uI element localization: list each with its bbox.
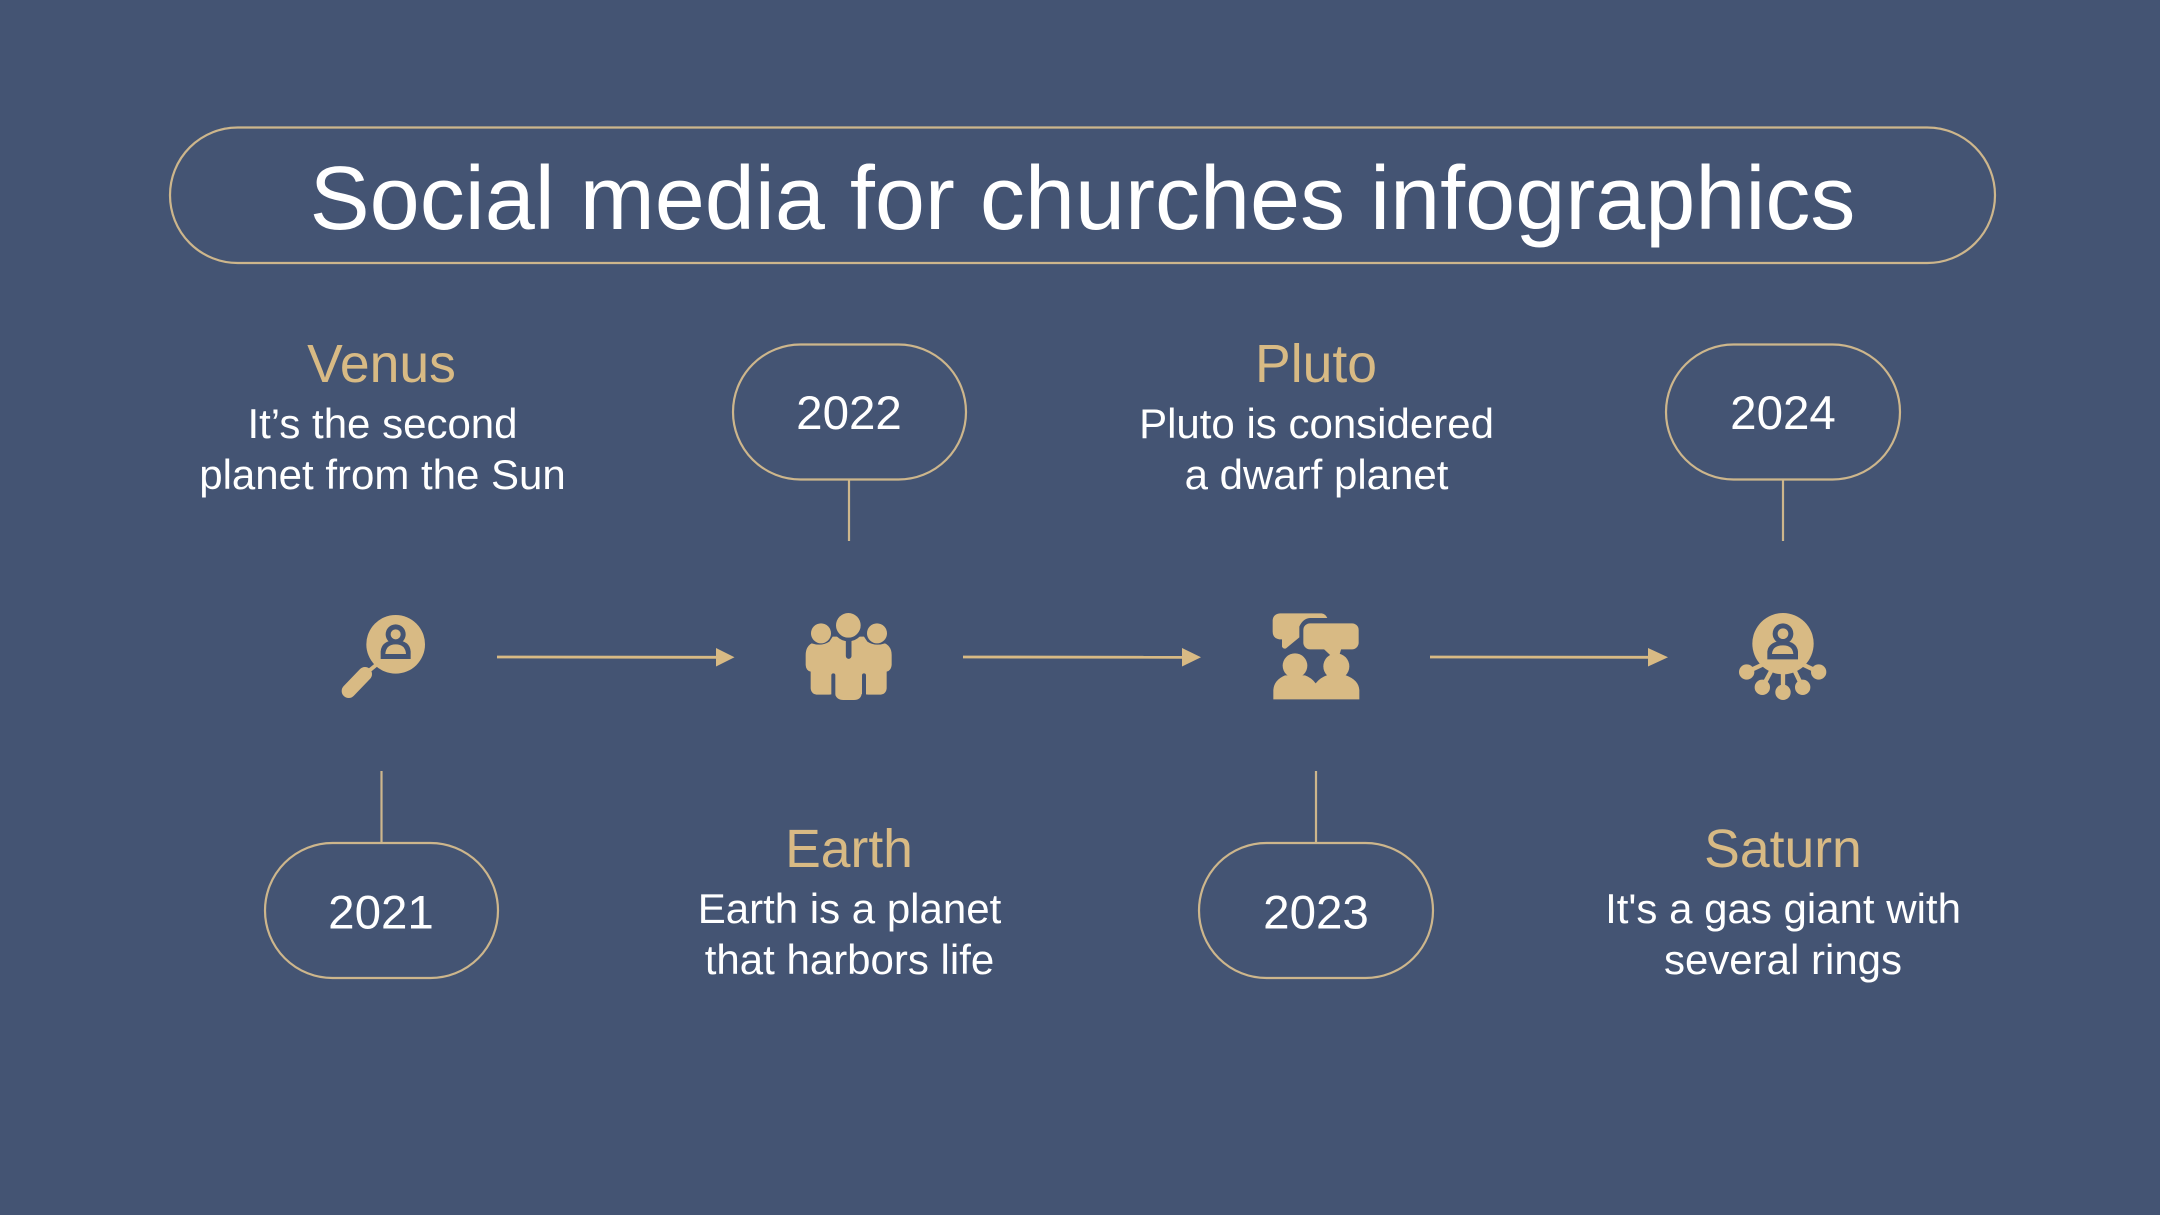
text block: Earth: [698, 820, 1002, 983]
text block: Pluto: Pluto: [1255, 335, 1377, 394]
title: Social media for churches infographics: [310, 149, 1855, 249]
icon: person with network nodes: [1739, 613, 1826, 700]
icon: group of people: [806, 609, 892, 700]
year pill: 2024: 2024: [1730, 387, 1836, 440]
icon: magnifier with person: [349, 615, 425, 691]
text block: Earth: that harbors life: [705, 936, 994, 983]
text block: Venus: It’s the second: [247, 400, 518, 447]
year pill: 2023: [1199, 771, 1433, 978]
arrow 1: [497, 648, 734, 666]
text block: Venus: planet from the Sun: [199, 451, 566, 498]
year pill: 2023: 2023: [1263, 886, 1369, 940]
text block: Earth: Earth is a planet: [698, 885, 1002, 932]
text block: Saturn: several rings: [1664, 936, 1902, 983]
year pill: 2021: 2021: [328, 886, 434, 940]
year pill: 2021: [265, 771, 498, 978]
text block: Pluto: [1139, 335, 1494, 498]
text block: Venus: Venus: [307, 335, 456, 394]
text block: Venus: [199, 335, 566, 498]
year pill: 2022: [733, 344, 966, 541]
text block: Saturn: Saturn: [1704, 820, 1862, 879]
text block: Pluto: Pluto is considered: [1139, 400, 1494, 447]
text block: Pluto: a dwarf planet: [1185, 451, 1449, 498]
arrow 2: [963, 648, 1201, 666]
arrow 3: [1430, 648, 1668, 666]
year pill: 2022: 2022: [796, 387, 902, 440]
text block: Saturn: It's a gas giant with: [1605, 885, 1961, 932]
year pill: 2024: [1666, 344, 1900, 541]
title: [170, 128, 1995, 263]
text block: Earth: Earth: [785, 820, 913, 879]
text block: Saturn: [1605, 820, 1961, 983]
icon: people talking with speech bubbles: [1273, 613, 1359, 699]
